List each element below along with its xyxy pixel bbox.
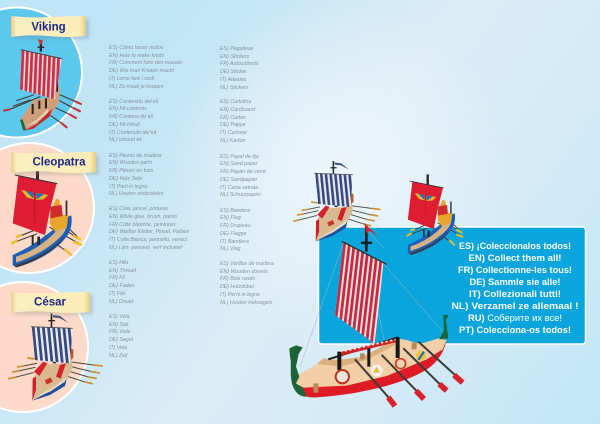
text block: stickers: ES) Pegatinas [220,46,254,52]
text: collect them all in eight languages: ES) ¡Coleccionalos todos! [459,241,571,252]
text block: sand paper [220,154,266,198]
panel: Cleopatra badge circle [0,143,94,273]
text block: wooden parts: NL) Houten onderdelen [108,191,163,197]
text: collect them all in eight languages: EN) Collect them all! [468,253,562,264]
banner: César: César [34,296,67,308]
text block: cardboard: NL) Karton [220,138,245,144]
text block: wooden dowels [220,261,274,306]
text block: kit contents: ES) Contenido del kit [108,99,158,105]
text block: sand paper: ES) Papel de lija [220,154,259,160]
text block: sail: IT) Vela [108,345,127,351]
text block: kit contents [108,99,158,143]
text block: knots [108,45,182,90]
text block: stickers: IT) Adesivo [220,77,246,83]
text block: thread: ES) Hilo [108,260,128,266]
text block: thread: IT) Filo [108,291,125,297]
illustration: large Viking ship [289,223,463,406]
text block: sand paper: FR) Papier de verre [220,169,266,175]
text block: stickers: DE) Sticker [220,69,247,75]
text block: knots: DE) Wie man Knoten macht [108,68,173,74]
text block: sand paper: EN) Sand paper [220,161,258,167]
text block: thread: EN) Thread [108,268,136,274]
panel: collect them all [318,227,586,344]
text block: glue and paints: NL) Lijm, penseel, verf inclusief [108,245,181,251]
text block: glue and paints: EN) White glue, brush, paints [108,214,177,220]
text block: sail: FR) Voile [108,329,130,335]
text block: knots: ES) Cómo hacer nudos [108,45,163,51]
text: collect them all in eight languages: IT) Collezionali tutti! [469,289,561,300]
banner: Cleopatra: Cleopatra [32,156,86,168]
text block: sand paper: DE) Sandpapier [220,177,257,183]
text block: wooden dowels: NL) Houten treknagels [220,300,272,306]
text: collect them all in eight languages: RU) Соберите их все! [468,313,562,324]
text block: cardboard [220,99,256,144]
text block: kit contents: EN) Kit contents [108,106,146,112]
text: collect them all in eight languages: DE) Sammle sie alle! [470,277,560,288]
text block: flag: IT) Bandiera [220,238,249,244]
banner: César [11,292,93,315]
text block: glue and paints: DE) Weißer Kleber, Pinsel, Farben [108,229,189,235]
text: collect them all in eight languages: FR) Collectionne-les tous! [458,265,572,276]
banner: Viking [11,16,89,39]
text block: cardboard: EN) Cardboard [220,107,255,113]
text block: flag: ES) Bandera [220,208,250,214]
text block: wooden parts: DE) Holz Teile [108,176,142,182]
text block: wooden parts: EN) Wooden parts [108,160,152,166]
text block: wooden dowels: DE) Holzdübel [220,284,254,290]
illustration: small César ship [9,313,102,401]
text block: stickers: FR) Autocollants [220,61,259,67]
text block: sail [108,314,133,359]
illustration: small Viking ship [4,39,81,131]
text block: wooden dowels: FR) Bois ronds [220,276,255,282]
text block: glue and paints [108,206,189,251]
text block: kit contents: DE) Kit Inhalt [108,122,139,128]
text block: thread [108,260,136,305]
text block: kit contents: NL) Inhoud kit [108,137,141,143]
text block: sail: DE) Segel [108,337,132,343]
text block: wooden dowels: IT) Perni in legno [220,292,260,298]
text: collect them all in eight languages: PT) Colecciona-os todos! [459,325,571,336]
text block: cardboard: FR) Carton [220,115,246,121]
text block: stickers: EN) Stickers [220,54,249,60]
text block: sand paper: IT) Carta vetrata [220,184,258,190]
text block: flag: EN) Flag [220,215,241,221]
text block: knots: EN) How to make knots [108,53,164,59]
text block: glue and paints: FR) Colle blanche, peintures [108,222,175,228]
text block: wooden parts: FR) Pièces en bois [108,168,153,174]
text block: wooden dowels: ES) Varillas de madera [220,261,274,267]
text block: knots: IT) come fare i nodi [108,76,154,82]
text: collect them all in eight languages [452,241,578,336]
text block: stickers: NL) Stickers [220,85,249,91]
text block: wooden parts: IT) Parti in legno [108,184,147,190]
text block: sail: NL) Zeil [108,353,127,359]
text block: cardboard: IT) Cartone [220,130,247,136]
text: collect them all in eight languages: NL) Verzamel ze allemaal ! [452,301,578,312]
text block: flag: FR) Drapeau [220,223,250,229]
text block: kit contents: FR) Contenu du kit [108,114,153,120]
illustration: César ship copy [294,161,380,241]
text block: flag: NL) Vlag [220,246,240,252]
text block: thread: DE) Faden [108,283,134,289]
text block: thread: FR) Fil [108,275,124,281]
panel: César badge circle [0,282,88,412]
text block: cardboard: ES) Cartulina [220,99,251,105]
text block: wooden parts [108,153,164,197]
text block: wooden parts: ES) Piezas de madera [108,153,161,159]
illustration: small Cleopatra ship [12,167,81,267]
banner: Viking: Viking [31,22,66,34]
text block: kit contents: IT) Contenuto del kit [108,130,156,136]
text block: knots: NL) Zo maak je knopen [108,84,163,90]
text block: sail: ES) Vela [108,314,129,320]
text block: sail: EN) Sail [108,322,128,328]
text block: wooden dowels: EN) Wooden dowels [220,269,268,275]
text block: flag [220,208,250,252]
text block: thread: NL) Draad [108,299,133,305]
text block: sand paper: NL) Schuurpapier [220,192,261,198]
text block: cardboard: DE) Pappe [220,122,246,128]
text block: flag: DE) Flagge [220,231,247,237]
banner: Cleopatra [11,152,99,175]
text block: glue and paints: ES) Cola, pincel, pinturas [108,206,168,212]
text block: stickers [220,46,259,91]
text block: knots: FR) Comment faire des noeuds [108,60,182,66]
text block: glue and paints: IT) Colla Bianca, pennello, vernici [108,237,187,243]
illustration: Cleopatra ship copy [407,174,463,255]
panel: Viking badge circle [0,8,82,138]
